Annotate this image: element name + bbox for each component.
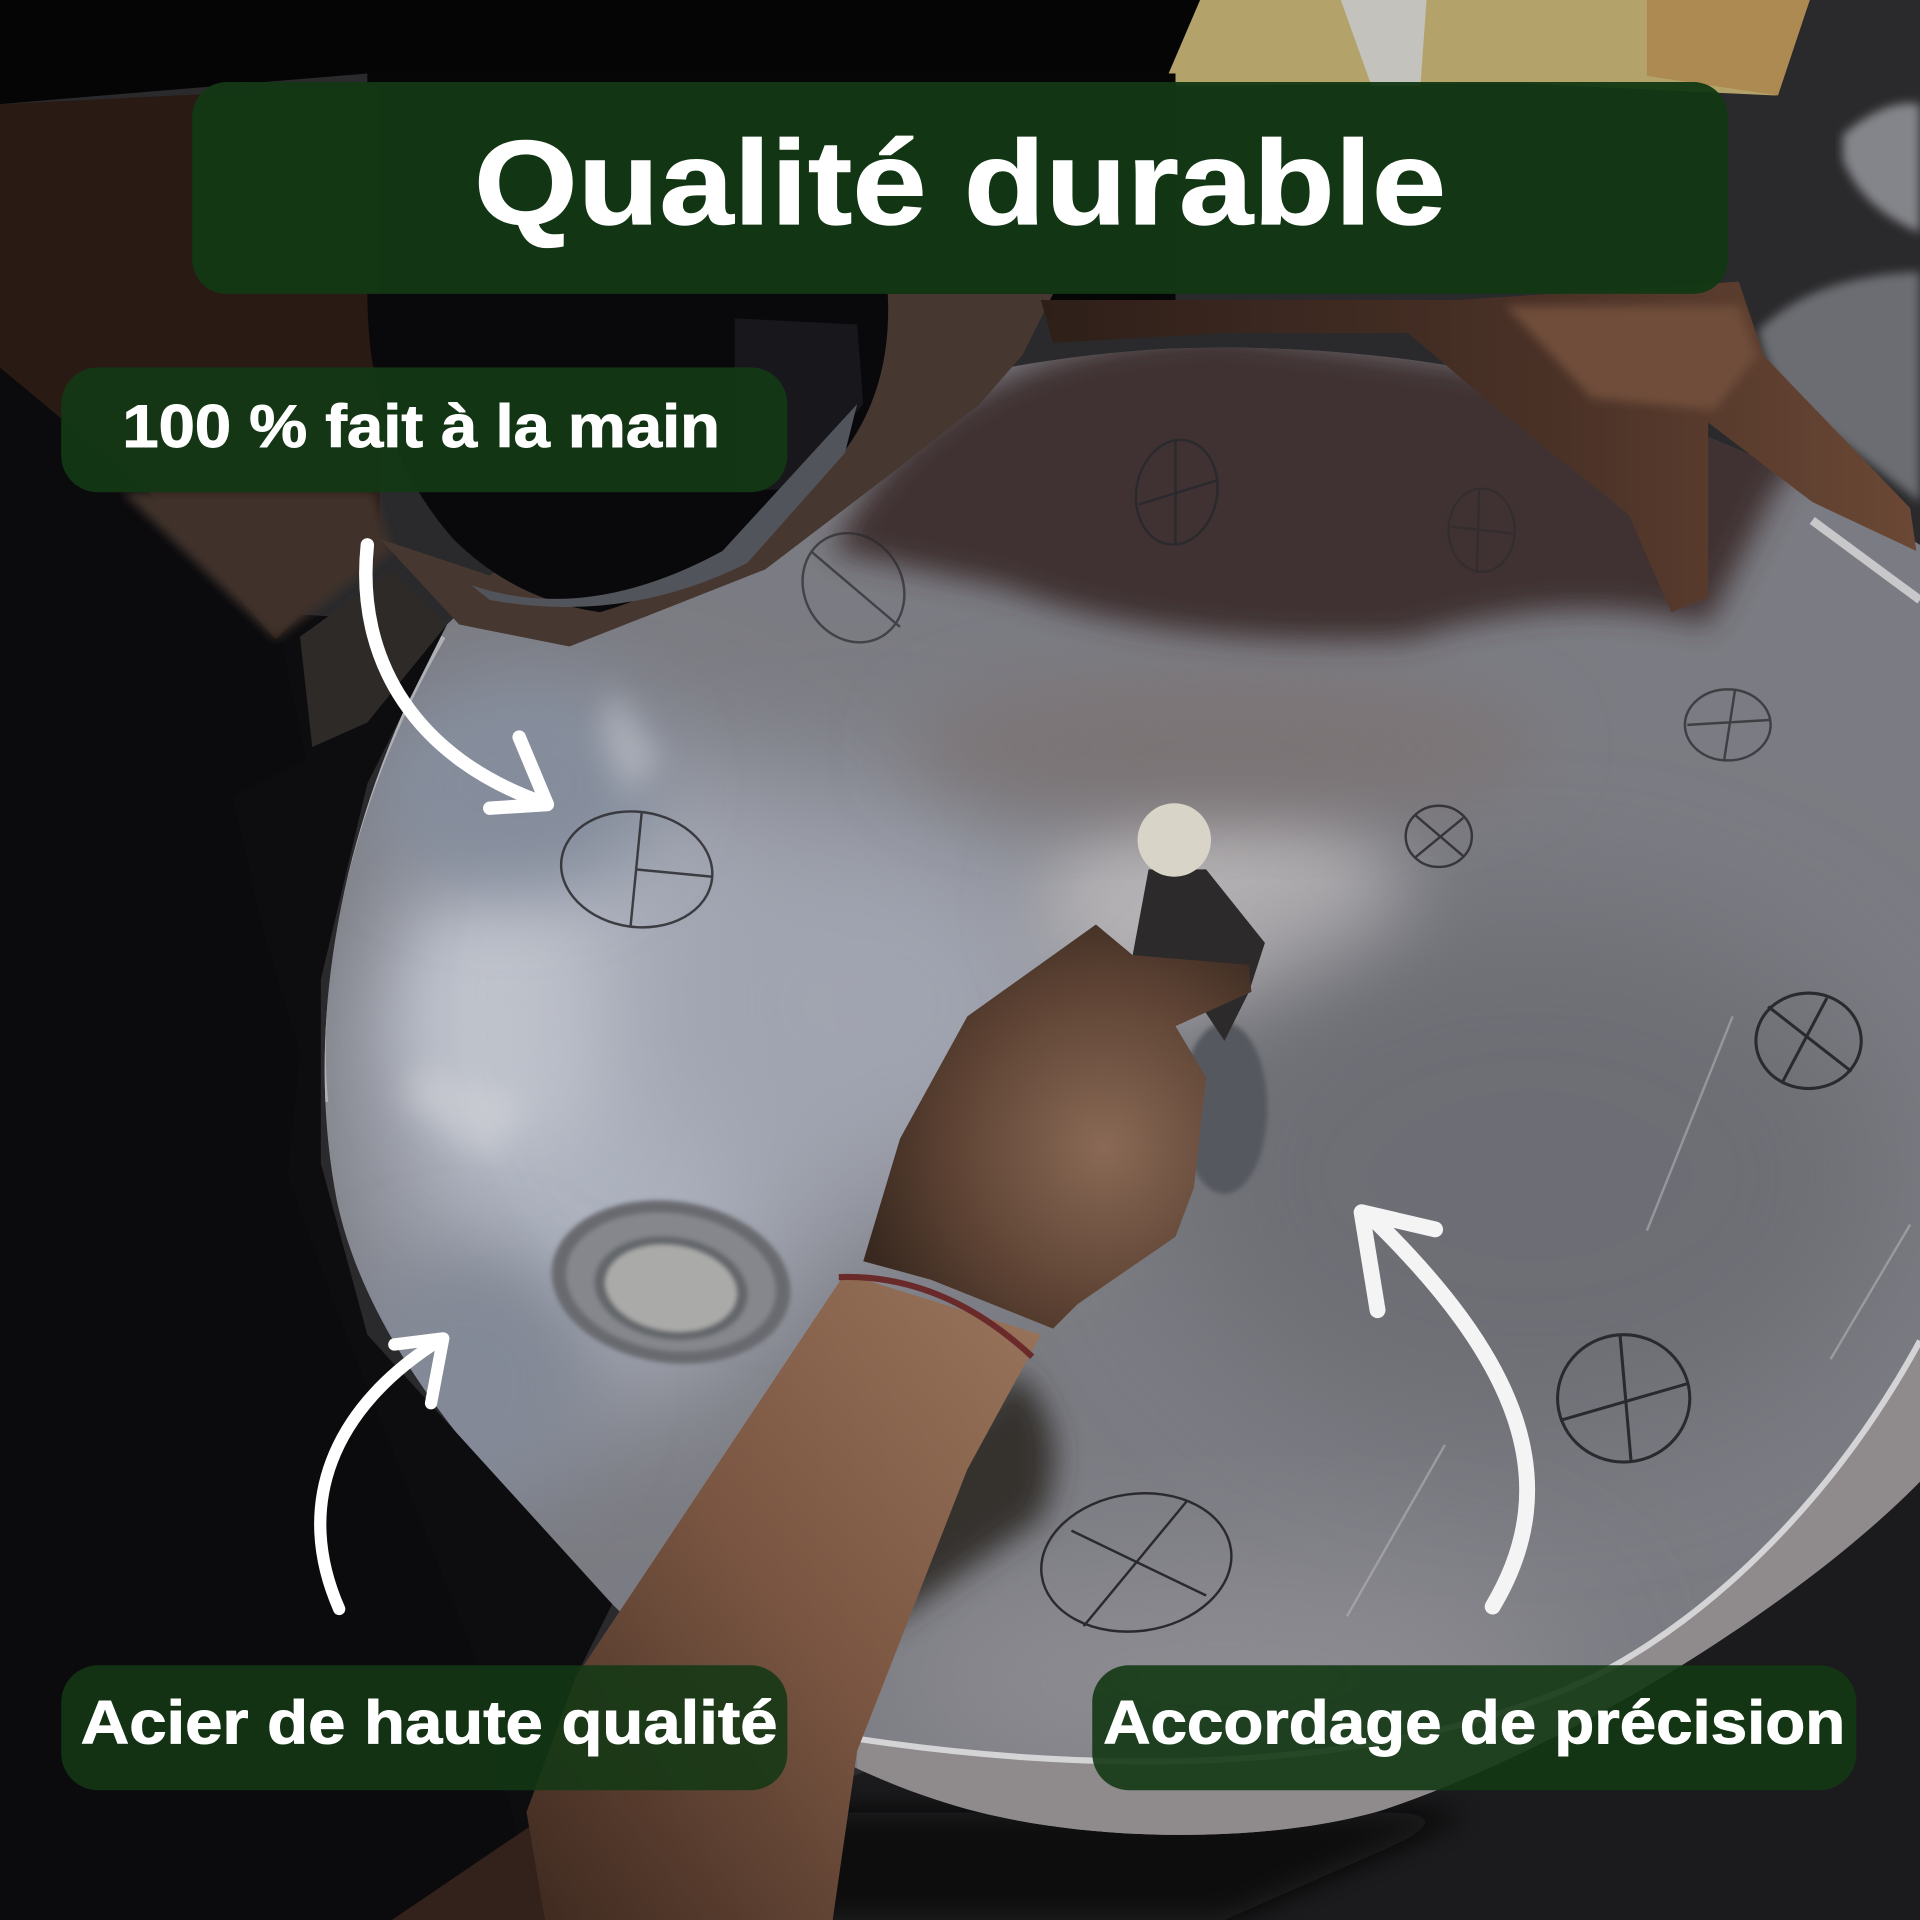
person: hair — [0, 0, 1200, 104]
pencil note marks — [554, 433, 1861, 1644]
hammer — [1133, 803, 1265, 1041]
plastic bag top right — [1758, 272, 1920, 502]
bright rim line — [857, 1341, 1920, 1761]
label: Accordage de précision: Accordage de précision — [1103, 1689, 1845, 1757]
scratches — [1347, 1016, 1910, 1616]
hand gripping the hammer — [863, 924, 1251, 1329]
wooden crate — [1163, 0, 1810, 96]
upper arm and hand holding the rim — [1041, 282, 1916, 612]
arrow: Acier label to steel disc — [320, 1338, 443, 1609]
person: face — [380, 294, 1053, 647]
upper sleeve of the forearm — [392, 1824, 545, 1920]
label: Accordage de précision — [1092, 1665, 1856, 1790]
title panel — [192, 82, 1728, 294]
ear defender — [367, 294, 888, 612]
top shadow on the disc — [833, 331, 1837, 641]
label: 100 % fait à la main — [61, 367, 787, 492]
steel disc — [324, 348, 1920, 1835]
label: Acier de haute qualité: Acier de haute qualité — [81, 1689, 778, 1757]
patch of floor behind neck — [300, 571, 447, 747]
label: 100 % fait à la main: 100 % fait à la main — [122, 393, 720, 460]
forearm — [527, 1273, 1041, 1920]
title text: Qualité durable — [474, 116, 1446, 250]
bracelet — [839, 1277, 1032, 1357]
arrow: top label to steel disc — [366, 545, 547, 808]
dark gap between person and disc — [0, 612, 612, 1920]
outer rim band — [857, 1341, 1920, 1861]
arrow: Accordage label to hammered note — [1362, 1212, 1527, 1607]
bright streaks — [404, 686, 661, 1163]
label: Acier de haute qualité — [61, 1665, 787, 1790]
forearm shadow on disc — [857, 1371, 1055, 1629]
dent: large oval note — [541, 1185, 801, 1379]
person: shirt — [0, 367, 539, 1920]
person: neck in shadow — [0, 86, 380, 639]
dent under the hammer — [1182, 1022, 1267, 1194]
stand bracket — [1341, 0, 1427, 86]
